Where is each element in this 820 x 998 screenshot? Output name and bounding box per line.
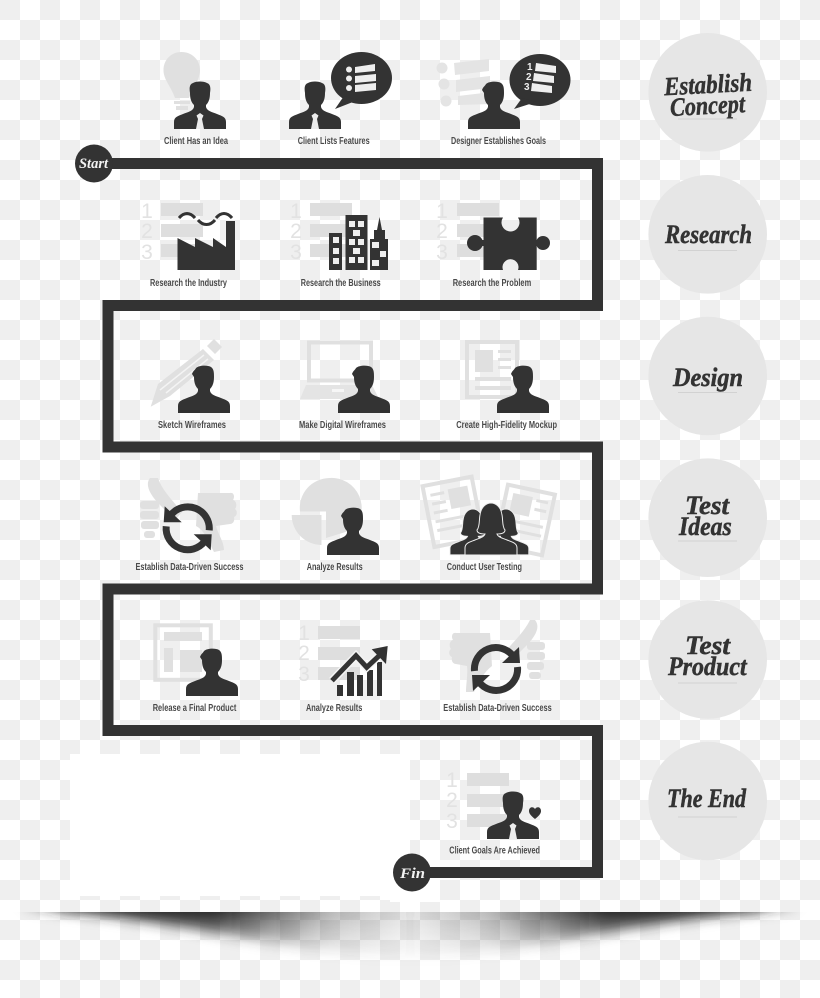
stage badge: The End: The End — [667, 784, 747, 813]
step: Analyze Results (pie) — [292, 478, 379, 573]
step: Release a Final Product — [153, 625, 238, 714]
step: Client Goals Are Achieved — [446, 769, 541, 856]
step: Create High-Fidelity Mockup — [456, 342, 557, 431]
fin marker: Fin — [399, 866, 425, 882]
stage badge: Test Product: Test — [685, 631, 731, 660]
floor shadow — [26, 912, 794, 956]
process path line — [94, 164, 598, 872]
stage badge: Research — [648, 175, 767, 294]
stage badge: Establish Concept: Establish — [662, 68, 753, 101]
label: Research the Industry — [150, 277, 227, 289]
stage badge: Establish Concept — [648, 33, 767, 152]
stage badge: Research: Research — [664, 220, 752, 249]
stage badge: Design: Design — [672, 363, 743, 392]
icon: designer with goals bubble: 1 — [527, 62, 533, 73]
step: Research the Industry — [141, 200, 235, 289]
stage badge: Test Product: Product — [667, 652, 747, 681]
icon: numbered list and city buildings: 2 — [290, 220, 302, 243]
icon: numbered list and growth chart: 1 — [298, 622, 310, 645]
icon: numbered list and factory: 2 — [141, 220, 153, 243]
label: Research the Business — [301, 277, 381, 289]
label: Establish Data-Driven Success — [136, 561, 244, 573]
icon: designer with goals bubble: 3 — [524, 82, 530, 93]
stage badge: Test Ideas: Test — [685, 491, 730, 520]
step: Designer Establishes Goals — [436, 54, 570, 147]
label: Release a Final Product — [153, 702, 237, 714]
label: Client Goals Are Achieved — [449, 844, 540, 856]
step: Establish Data-Driven Success (final) — [443, 620, 552, 714]
step: Sketch Wireframes — [151, 339, 230, 431]
start marker: Start — [79, 156, 109, 172]
stage badge: Test Ideas — [648, 458, 767, 577]
step: Client Has an Idea — [164, 52, 228, 147]
icon: A/B pages and user group — [423, 477, 555, 555]
icon: numbered list and city buildings: 1 — [290, 200, 302, 223]
icon: numbered list and puzzle piece: 2 — [436, 220, 448, 243]
label: Analyze Results — [307, 561, 363, 573]
step: Client Lists Features — [289, 52, 392, 147]
white patch behind the finish — [70, 754, 440, 902]
fin marker — [393, 854, 431, 892]
icon: designer with goals bubble — [436, 54, 570, 129]
icon: numbered list and city buildings: 3 — [290, 241, 302, 264]
label: Client Has an Idea — [164, 135, 228, 147]
icon: numbered list and growth chart — [298, 622, 388, 696]
icon: numbered list and puzzle piece: 1 — [436, 200, 448, 223]
label: Sketch Wireframes — [158, 419, 226, 431]
label: Conduct User Testing — [447, 561, 522, 573]
step: Establish Data-Driven Success — [136, 478, 244, 573]
icon: pie chart and designer — [292, 478, 379, 555]
label: Analyze Results — [306, 702, 362, 714]
start marker — [75, 144, 113, 182]
stage badge: Design — [648, 317, 767, 435]
step: Research the Business — [290, 200, 388, 289]
step: Research the Problem — [436, 200, 550, 289]
icon: numbered list and city buildings — [290, 200, 388, 270]
stage badge: The End — [648, 742, 767, 860]
step: Conduct User Testing — [423, 477, 555, 573]
stage badge: Test Product — [648, 600, 767, 719]
icon: layout page and designer — [155, 625, 238, 696]
icon: numbered list and puzzle piece: 3 — [436, 241, 448, 264]
icon: numbered list, client and heart: 2 — [446, 789, 458, 812]
icon: pencil and designer — [151, 339, 230, 413]
icon: numbered list, client and heart: 1 — [446, 769, 458, 792]
label: Designer Establishes Goals — [451, 135, 546, 147]
icon: numbered list, client and heart: 3 — [446, 810, 458, 833]
label: Make Digital Wireframes — [299, 419, 386, 431]
icon: laptop and designer — [300, 342, 390, 413]
icon: client with list speech bubble — [289, 52, 392, 129]
icon: numbered list and growth chart: 2 — [298, 642, 310, 665]
label: Client Lists Features — [298, 135, 370, 147]
icon: thumbs-up ghost and refresh arrows — [449, 620, 545, 692]
label: Create High-Fidelity Mockup — [456, 419, 557, 431]
icon: numbered list and puzzle piece — [436, 200, 550, 270]
icon: numbered list and factory: 1 — [141, 200, 153, 223]
stage badge: Establish Concept: Concept — [669, 89, 746, 122]
icon: mockup page and designer — [467, 342, 549, 413]
icon: numbered list and factory — [141, 200, 235, 270]
icon: designer with goals bubble: 2 — [526, 72, 532, 83]
icon: thumbs ghost and refresh arrows — [140, 478, 237, 552]
stage badge: Test Ideas: Ideas — [678, 512, 732, 541]
icon: light bulb and client — [164, 52, 226, 129]
icon: numbered list and factory: 3 — [141, 241, 153, 264]
label: Research the Problem — [453, 277, 531, 289]
icon: numbered list, client and heart — [446, 769, 541, 839]
icon: numbered list and growth chart: 3 — [298, 663, 310, 686]
step: Analyze Results (growth chart) — [298, 622, 388, 714]
label: Establish Data-Driven Success — [443, 702, 552, 714]
step: Make Digital Wireframes — [299, 342, 390, 431]
